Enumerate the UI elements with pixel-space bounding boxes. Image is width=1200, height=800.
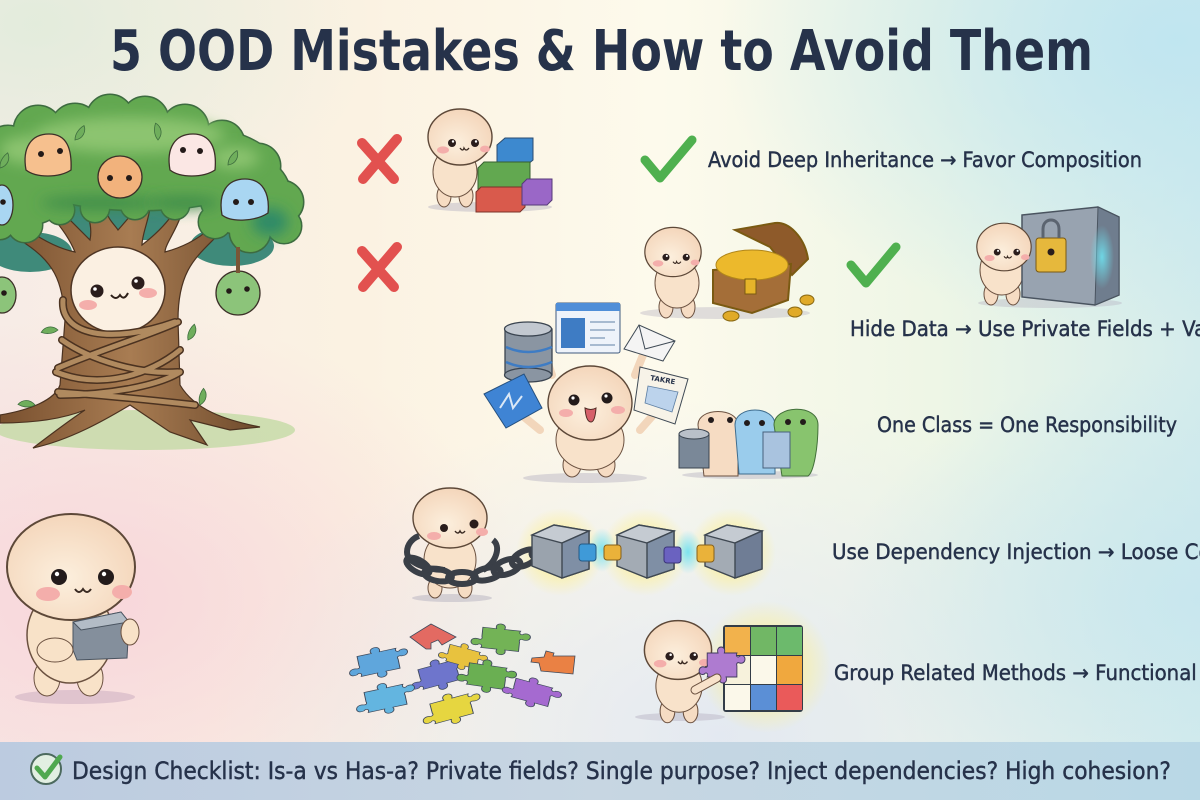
chain [404,536,553,584]
character holding a block [7,514,139,704]
grey cube [73,612,129,660]
illustration: character stacking blocks [428,109,552,212]
vines [56,300,195,405]
illustration: overloaded character juggling: TAKRE [650,374,676,386]
illustration: character at safe [977,207,1122,308]
illustration: scattered puzzle pieces [345,621,575,731]
tree characters [0,134,268,315]
icon: red cross 1 [362,139,397,179]
illustration: tree wrapped in vines with characters [0,95,303,450]
document [634,367,688,424]
text: fix 3: One Class = One Responsibility [877,413,1177,437]
browser window [556,303,620,353]
illustration: overloaded character juggling [484,303,688,483]
tree face [71,247,165,333]
icon: checklist check [31,754,61,784]
text: fix 1: Avoid Deep Inheritance → Favor Composition [708,148,1142,172]
illustration: character at treasure chest [640,223,814,321]
illustration: team of three characters [679,409,818,479]
tree canopy [0,95,303,252]
database [504,322,552,382]
illustration: chained character and coupled cubes [404,488,776,602]
envelope [624,325,675,361]
icon: green check 1 [645,140,692,178]
chart card [484,374,542,428]
cubes [532,525,762,578]
checklist band [0,742,1200,800]
icon: red cross 2 [362,247,397,287]
icon: green check 2 [851,247,896,283]
illustration: character completing puzzle [635,601,831,733]
